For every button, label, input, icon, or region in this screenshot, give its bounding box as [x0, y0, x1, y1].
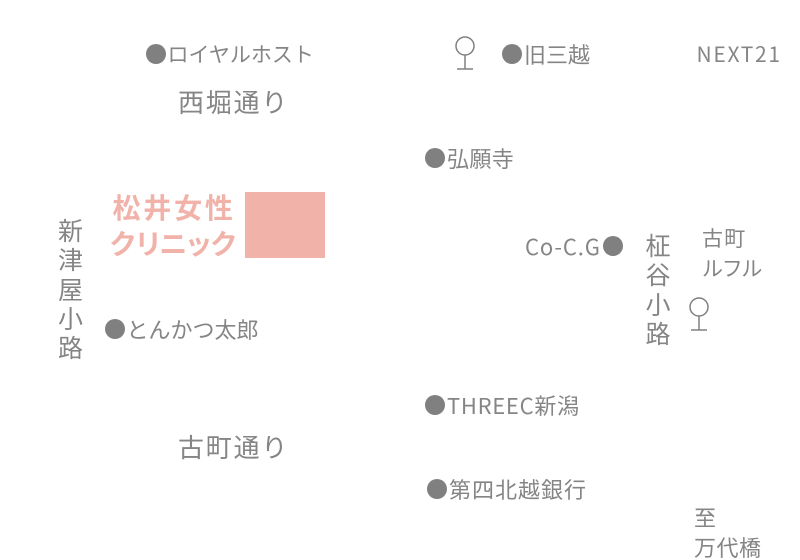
- label: 至 万代橋: [694, 501, 762, 560]
- street: 古町通り: 古町通り: [178, 428, 289, 465]
- label: ロイヤルホスト: ロイヤルホスト: [168, 39, 314, 69]
- label: 古町ルフル: 古町: [702, 223, 746, 253]
- clinic name: [109, 187, 236, 262]
- street: 柾谷小路: 谷: [645, 256, 670, 292]
- street: 柾谷小路: 路: [645, 315, 670, 351]
- label: 至 万代橋: 至: [694, 501, 717, 533]
- label: 古町ルフル: ルフル: [702, 253, 761, 283]
- icon: traffic signal top: [455, 36, 475, 70]
- street: 西堀通り: 西堀通り: [178, 83, 289, 120]
- street: 柾谷小路: 柾: [645, 227, 670, 263]
- clinic name: クリニック: [109, 222, 235, 262]
- label: 古町ルフル: [702, 223, 762, 283]
- label: Co-C.G: Co-C.G: [525, 230, 601, 262]
- clinic name: 松井女性: [112, 187, 236, 227]
- street: 新津屋小路: 路: [58, 329, 83, 365]
- street: 新津屋小路: 津: [58, 241, 83, 277]
- label: 第四北越銀行: 第四北越銀行: [449, 473, 587, 505]
- street: 新津屋小路: 小: [58, 300, 83, 336]
- street: 新津屋小路: 屋: [58, 271, 83, 307]
- street: 新津屋小路: 新: [58, 212, 83, 248]
- label: とんかつ太郎: とんかつ太郎: [126, 313, 259, 345]
- label: THREEC新潟: THREEC新潟: [447, 389, 580, 421]
- label: NEXT21: NEXT21: [696, 38, 782, 68]
- street: 新津屋小路: [58, 212, 83, 365]
- label: 旧三越: 旧三越: [524, 38, 590, 70]
- clinic marker: [245, 192, 325, 258]
- label: 弘願寺: 弘願寺: [447, 142, 514, 174]
- icon: traffic signal right: [689, 297, 709, 331]
- street: 柾谷小路: 小: [645, 286, 670, 322]
- street: 柾谷小路: [645, 227, 670, 351]
